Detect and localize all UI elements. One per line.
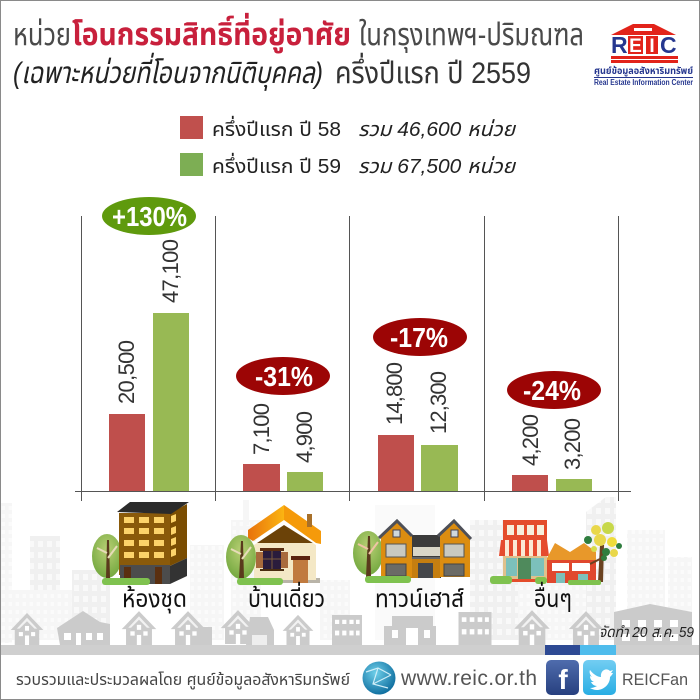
group: บ้านเดี่ยว bars (243, 403, 323, 491)
badge: -31%: -31% (255, 361, 313, 392)
title (13, 12, 584, 91)
title: โอนกรรมสิทธิ์ที่อยู่อาศัย (72, 12, 351, 53)
badge: +130%: +130% (112, 201, 187, 232)
icon: townhouse (353, 521, 471, 583)
icon: facebook: f (558, 664, 568, 695)
icon: twitter (583, 660, 616, 695)
logo: REIC (594, 24, 693, 87)
legend: รวม 67,500 หน่วย (358, 156, 517, 178)
icon: condominium building (92, 502, 189, 585)
badge: -31% (236, 357, 330, 395)
social colour tabs (545, 645, 616, 655)
badge: -24% (507, 371, 601, 409)
social handle: REICFan (622, 670, 688, 689)
title: หน่วย (13, 17, 71, 52)
label: ทาวน์เฮาส์: ทาวน์เฮาส์ (375, 585, 464, 613)
logo: REIC: I (649, 36, 655, 57)
badge: -17% (373, 318, 467, 356)
title: ครึ่งปีแรก ปี 2559 (335, 52, 531, 90)
legend: ครึ่งปีแรก ปี 59 (212, 152, 341, 178)
logo: REIC: E (629, 36, 642, 57)
ground band (0, 645, 700, 655)
badge: -24%: -24% (523, 375, 581, 406)
legend: ครึ่งปีแรก ปี 58 (212, 115, 341, 141)
group: บ้านเดี่ยว bars: 7,100 (249, 403, 274, 455)
label: ห้องชุด: ห้องชุด (122, 585, 187, 614)
group: ทาวน์เฮาส์ bars: 12,300 (426, 371, 451, 434)
group: ทาวน์เฮาส์ bars (378, 362, 458, 491)
legend: รวม 46,600 หน่วย (358, 119, 517, 141)
label: บ้านเดี่ยว: บ้านเดี่ยว (248, 581, 325, 613)
title: ในกรุงเทพฯ-ปริมณฑล (359, 17, 584, 53)
website url: www.reic.or.th (400, 667, 537, 690)
background: pale city skyline (0, 497, 692, 643)
badge: -17%: -17% (390, 322, 448, 353)
icon: globe (362, 662, 396, 694)
group: อื่นๆ bars: 4,200 (518, 414, 543, 466)
logo: REIC: R (611, 32, 628, 58)
label: อื่นๆ: อื่นๆ (534, 581, 572, 613)
group: ห้องชุด bars: 20,500 (114, 340, 139, 404)
title: (เฉพาะหน่วยที่โอนจากนิติบุคคล) (13, 52, 323, 91)
legend (180, 115, 517, 178)
icon: shops and other buildings (490, 520, 622, 585)
icon: facebook (546, 660, 579, 695)
group: ทาวน์เฮาส์ bars: 14,800 (382, 362, 407, 425)
bar chart (75, 216, 631, 501)
icon: detached house (226, 505, 321, 585)
group: บ้านเดี่ยว bars: 4,900 (292, 411, 317, 463)
group: ห้องชุด bars (109, 239, 189, 491)
logo: REIC: C (660, 32, 677, 58)
group: อื่นๆ bars (512, 414, 592, 491)
group: อื่นๆ bars: 3,200 (560, 418, 585, 470)
background: grey houses row (11, 604, 692, 645)
footer credit: รวบรวมและประมวลผลโดย ศูนย์ข้อมูลอสังหาริมทรัพย์ (16, 672, 350, 689)
group: ห้องชุด bars: 47,100 (158, 239, 183, 303)
logo: REIC: ศูนย์ข้อมูลอสังหาริมทรัพย์ (594, 64, 693, 77)
